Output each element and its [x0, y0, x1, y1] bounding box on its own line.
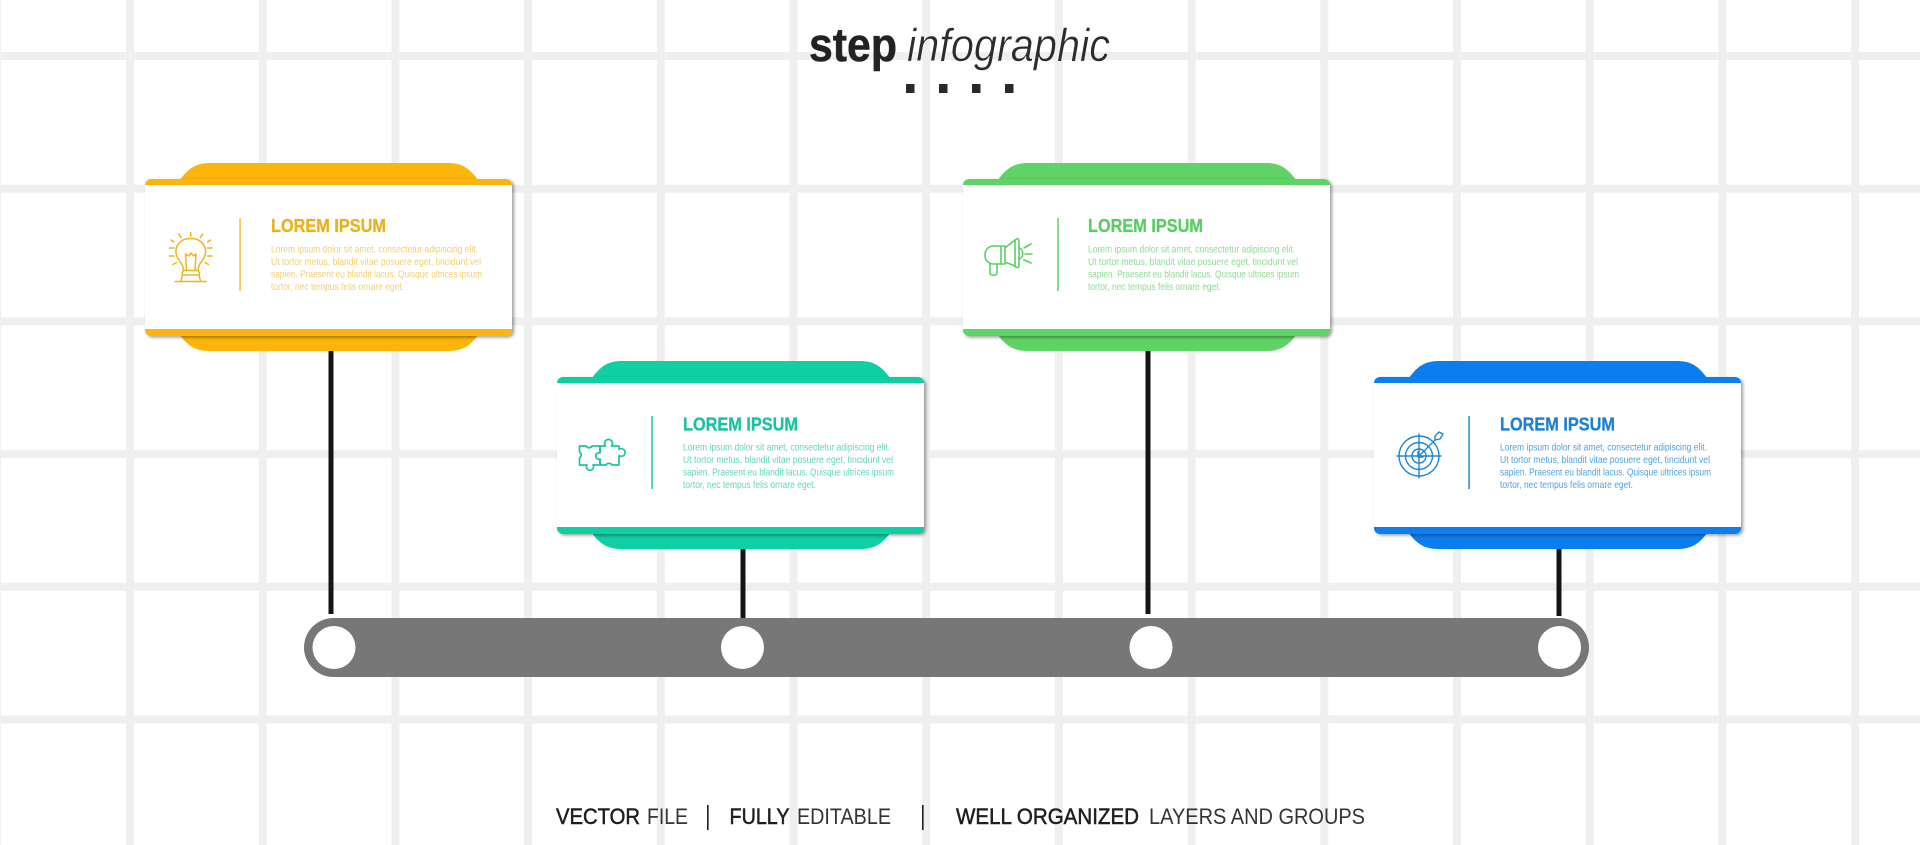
title: step infographic	[809, 18, 1110, 71]
divider	[239, 218, 241, 291]
timeline node 3	[1130, 626, 1172, 669]
footer caption: FILE	[647, 804, 688, 829]
divider	[651, 416, 653, 489]
body text: tortor, nec tempus felis ornare eget.	[683, 479, 816, 491]
connector line 1	[328, 345, 334, 614]
icon: megaphone	[985, 239, 1032, 275]
timeline bar with circles	[304, 618, 1589, 677]
footer caption: WELL ORGANIZED	[956, 804, 1139, 829]
footer caption	[556, 804, 1365, 830]
icon: target with arrow	[1397, 432, 1443, 478]
title dots	[906, 84, 1014, 93]
footer caption: VECTOR	[556, 804, 640, 829]
title: step infographic: infographic	[907, 19, 1110, 71]
divider	[1468, 416, 1470, 489]
connector line 4	[1556, 543, 1562, 616]
footer caption: LAYERS AND GROUPS	[1149, 804, 1365, 829]
panel: step 1 yellow card	[145, 163, 512, 351]
timeline node 4	[1538, 626, 1581, 669]
timeline node 2	[721, 626, 764, 669]
body text: Ut tortor metus, blandit vitae posuere eget, tincidunt vel	[1088, 256, 1298, 268]
timeline node 1	[312, 626, 356, 669]
body text: sapien. Praesent eu blandit lacus. Quisque ultrices ipsum	[1500, 466, 1711, 478]
connector line 2	[740, 543, 746, 620]
heading: LOREM IPSUM	[683, 414, 798, 434]
body text	[271, 244, 482, 293]
heading: LOREM IPSUM	[1088, 215, 1203, 236]
title: step infographic: step	[809, 18, 897, 71]
body text: tortor, nec tempus felis ornare eget.	[1500, 479, 1633, 491]
body text: Ut tortor metus, blandit vitae posuere eget, tincidunt vel	[1500, 454, 1710, 466]
divider	[1057, 218, 1059, 291]
panel: step 2 teal card	[557, 361, 924, 549]
body text	[1500, 442, 1711, 491]
heading: LOREM IPSUM	[1500, 414, 1615, 434]
panel: step 4 blue card	[1374, 361, 1741, 549]
connector line 3	[1146, 345, 1150, 614]
body text	[683, 442, 894, 491]
body text: sapien. Praesent eu blandit lacus. Quisque ultrices ipsum	[271, 268, 482, 280]
body text: tortor, nec tempus felis ornare eget.	[1088, 281, 1221, 293]
body text: Lorem ipsum dolor sit amet, consectetur adipiscing elit.	[1088, 244, 1295, 256]
body text: Lorem ipsum dolor sit amet, consectetur adipiscing elit.	[683, 442, 890, 454]
footer caption: EDITABLE	[797, 804, 891, 829]
body text: sapien. Praesent eu blandit lacus. Quisque ultrices ipsum	[1088, 268, 1299, 280]
body text: tortor, nec tempus felis ornare eget.	[271, 281, 404, 293]
icon: puzzle pieces	[580, 439, 625, 470]
body text	[1088, 244, 1299, 293]
footer caption: FULLY	[730, 804, 790, 829]
body text: Lorem ipsum dolor sit amet, consectetur adipiscing elit.	[271, 244, 478, 256]
body text: sapien. Praesent eu blandit lacus. Quisque ultrices ipsum	[683, 466, 894, 478]
body text: Lorem ipsum dolor sit amet, consectetur adipiscing elit.	[1500, 442, 1707, 454]
icon: light bulb	[170, 232, 212, 282]
body text: Ut tortor metus, blandit vitae posuere eget, tincidunt vel	[271, 256, 481, 268]
body text: Ut tortor metus, blandit vitae posuere eget, tincidunt vel	[683, 454, 893, 466]
panel: step 3 green card	[963, 163, 1330, 351]
heading: LOREM IPSUM	[271, 215, 386, 236]
